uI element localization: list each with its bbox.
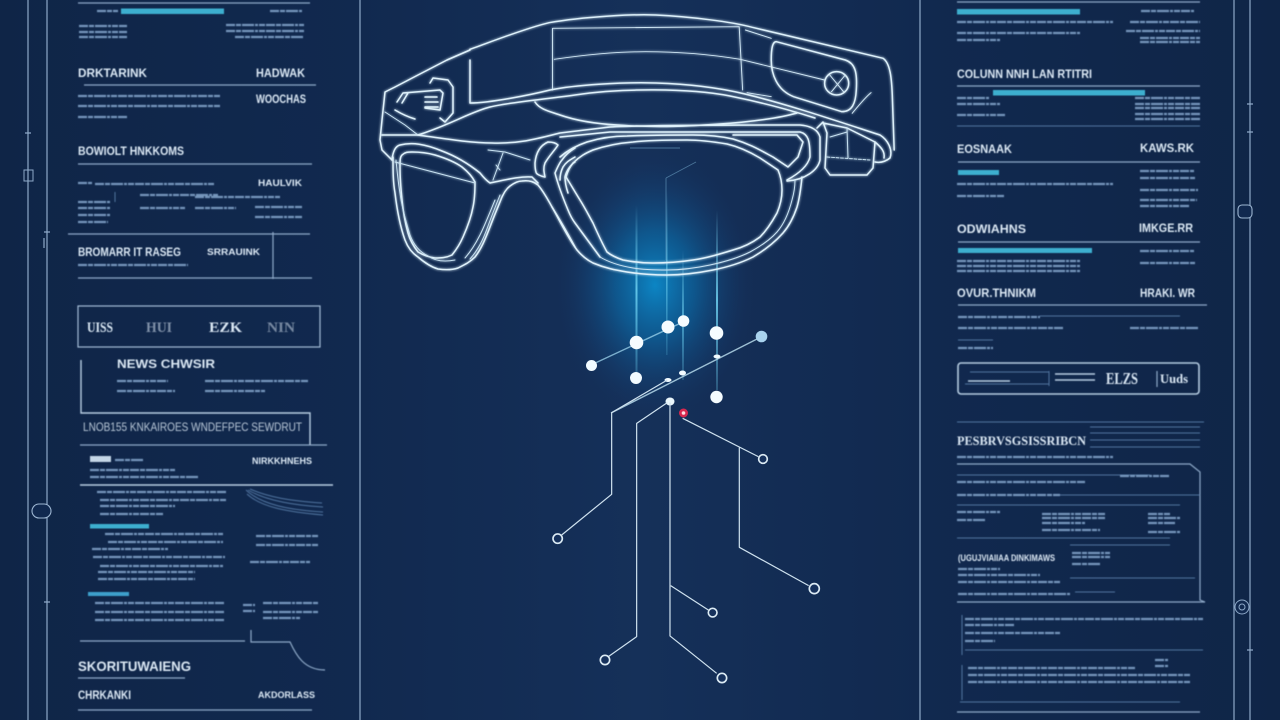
left lens	[392, 144, 538, 183]
stat box: EZK	[209, 320, 242, 336]
panel: right frame rails	[920, 0, 1253, 720]
nose pad	[535, 142, 558, 177]
progress bar: wide	[993, 90, 1145, 96]
bridge details	[488, 150, 530, 180]
progress bar: medium	[958, 248, 1092, 253]
heading: HRAKI. WR: HRAKI. WR	[1140, 288, 1196, 300]
stat box: right: ELZS	[1106, 369, 1138, 388]
heading: IMKGE.RR: IMKGE.RR	[1139, 223, 1194, 235]
heading: EOSNAAK: EOSNAAK	[957, 144, 1013, 156]
progress bar: top left	[121, 8, 224, 14]
heading: BROMARR IT RASEG: BROMARR IT RASEG	[78, 247, 181, 259]
lens reflections	[630, 148, 696, 260]
heading: SKORITUWAIENG: SKORITUWAIENG	[78, 658, 191, 674]
stat box	[78, 306, 320, 347]
illustration: smart glasses	[380, 15, 894, 275]
icon: right rail spiral	[1235, 600, 1249, 614]
heading: CHRKANKI: CHRKANKI	[78, 690, 131, 702]
stat box: UISS	[87, 320, 113, 336]
headband	[470, 15, 894, 150]
progress bar: middle left	[90, 524, 149, 528]
stat box: right	[958, 363, 1199, 394]
band left end	[380, 50, 470, 160]
heading: HAULVIK: HAULVIK	[258, 178, 302, 189]
heading: WOOCHAS: WOOCHAS	[256, 94, 306, 106]
icon: right rail bracket	[1238, 205, 1252, 218]
under lens arc	[535, 102, 797, 127]
stat box: right: Uuds	[1160, 371, 1188, 386]
heading: PESBRVSGSISSRIBCN: PESBRVSGSISSRIBCN	[957, 433, 1087, 448]
heading: NEWS CHWSIR: NEWS CHWSIR	[117, 359, 216, 371]
icon: left rail capsule	[32, 504, 51, 518]
panel: left frame rails	[24, 0, 360, 720]
right hinge	[817, 122, 875, 175]
right lens	[566, 140, 782, 263]
heading: AKDORLASS: AKDORLASS	[258, 690, 315, 701]
icon: left rail bracket	[24, 170, 33, 181]
heading: NIRKKHNEHS: NIRKKHNEHS	[252, 456, 312, 467]
heading: ODWIAHNS: ODWIAHNS	[957, 224, 1026, 236]
stat box: NIN	[267, 320, 295, 336]
heading: SRRAUINK: SRRAUINK	[207, 247, 260, 258]
panel: left specifications	[68, 3, 333, 710]
heading: OVUR.THNIKM: OVUR.THNIKM	[957, 288, 1036, 300]
heading: COLUNN NNH LAN RTITRI: COLUNN NNH LAN RTITRI	[957, 69, 1092, 81]
light beams	[636, 190, 718, 390]
upper frame	[418, 125, 820, 181]
light glow under lens	[555, 150, 755, 420]
heading: DRKTARINK: DRKTARINK	[78, 68, 148, 80]
panel: right detail frame	[957, 464, 1205, 602]
heading: UGUJVIAIIAA DINKIMAWS: (UGUJVIAIIAA DINKIMAWS	[958, 553, 1055, 564]
progress bar: top right	[957, 9, 1080, 14]
stat box: HUI	[146, 320, 172, 336]
chart: curved lines	[246, 489, 323, 515]
light nodes	[586, 315, 767, 418]
red sensor node	[679, 408, 688, 418]
panel: right specifications	[957, 2, 1207, 712]
icon: dial	[825, 72, 849, 95]
side module	[771, 42, 857, 112]
camera housing	[397, 78, 453, 122]
heading: KAWS.RK: KAWS.RK	[1140, 143, 1195, 155]
progress bar: lower left	[88, 592, 129, 596]
banner text: LNOB155 KNKAIROES WNDEFPEC SEWDRUT	[83, 422, 302, 434]
circuit lines	[553, 380, 819, 683]
heading: HADWAK: HADWAK	[256, 68, 306, 80]
progress bar: short	[958, 170, 999, 175]
heading: BOWIOLT HNKKOMS: BOWIOLT HNKKOMS	[78, 146, 184, 158]
